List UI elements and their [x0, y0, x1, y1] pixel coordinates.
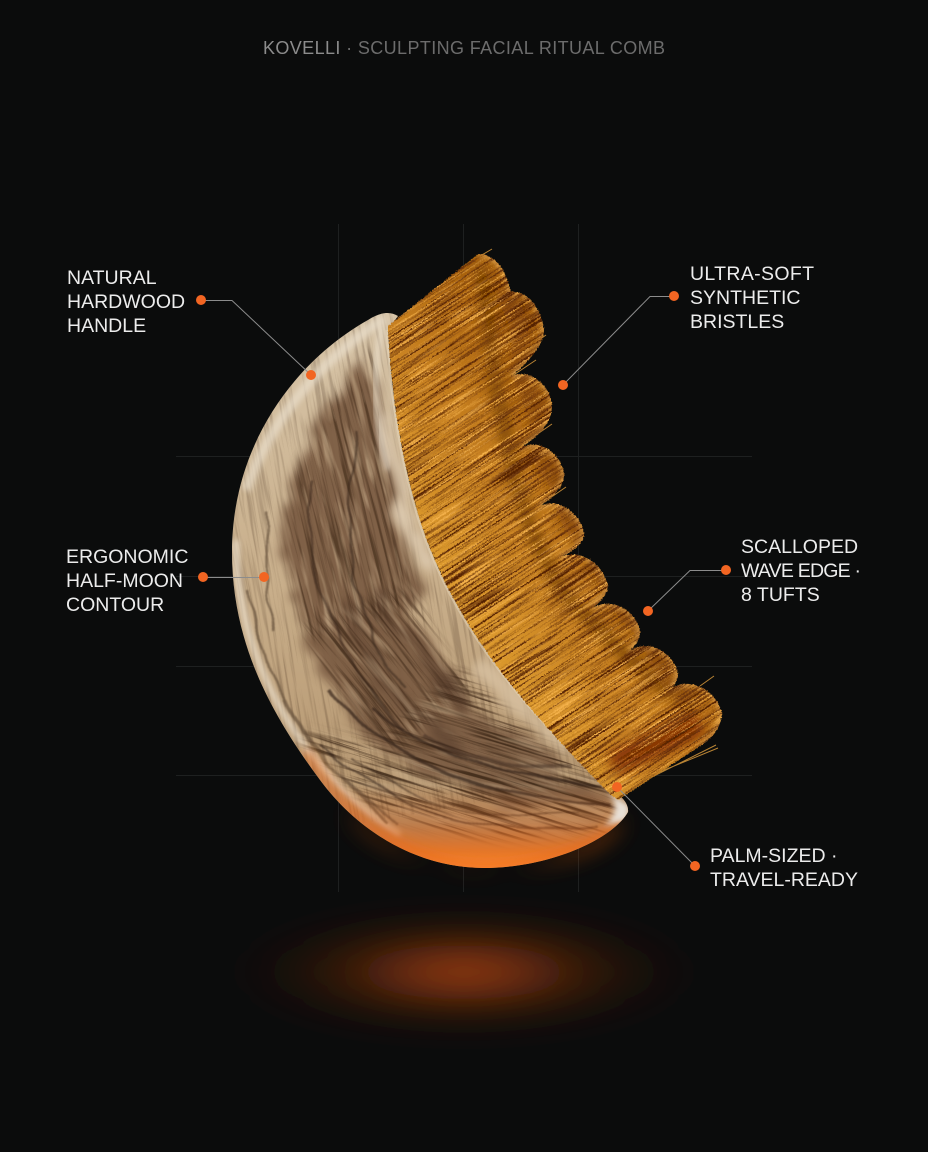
heartwood patches — [345, 590, 470, 750]
callout: scalloped wave edge: SCALLOPED — [741, 536, 858, 558]
floor glow — [219, 910, 709, 1034]
callout: natural hardwood handle — [67, 267, 316, 380]
infographic canvas — [67, 41, 859, 1032]
central ridge — [480, 265, 672, 695]
bristles — [388, 254, 722, 800]
callout: ultra-soft synthetic bristles: BRISTLES — [690, 311, 784, 333]
outer crescent grain — [232, 314, 595, 822]
callout: ergonomic half-moon contour: ERGONOMIC — [66, 546, 188, 568]
callout: ergonomic half-moon contour: CONTOUR — [66, 594, 164, 616]
callout: ergonomic half-moon contour — [66, 546, 269, 616]
tuft shading — [500, 290, 690, 700]
callout: ultra-soft synthetic bristles — [558, 263, 814, 390]
deep bristle shadow near tip — [612, 722, 700, 765]
callout: ultra-soft synthetic bristles: SYNTHETIC — [690, 287, 801, 309]
inner edge highlight — [386, 330, 579, 761]
dark grain lines — [310, 430, 612, 830]
callout: ergonomic half-moon contour: HALF-MOON — [66, 570, 183, 592]
construction grid — [176, 224, 752, 892]
callout: scalloped wave edge — [643, 536, 861, 616]
callout: ultra-soft synthetic bristles: ULTRA-SOFT — [690, 263, 814, 285]
callout: palm-sized travel-ready — [612, 782, 858, 891]
callout: palm-sized travel-ready: TRAVEL-READY — [710, 869, 858, 891]
wooden handle — [232, 313, 628, 868]
callout: natural hardwood handle: HARDWOOD — [67, 291, 185, 313]
callout: natural hardwood handle: NATURAL — [67, 267, 157, 289]
bristle fibre streaks — [388, 254, 722, 800]
orange rim along lower edge — [305, 752, 626, 868]
callout: scalloped wave edge: WAVE EDGE · — [741, 560, 861, 582]
tuft lit rim — [478, 254, 722, 746]
stray bristle hairs — [470, 249, 718, 788]
product glow under comb — [345, 810, 625, 870]
title: KOVELLI · SCULPTING FACIAL RITUAL COMB — [263, 38, 665, 58]
callout: palm-sized travel-ready: PALM-SIZED · — [710, 845, 837, 867]
comb — [232, 248, 722, 868]
callout: scalloped wave edge: 8 TUFTS — [741, 584, 820, 606]
warm underglow — [342, 791, 618, 868]
callout: natural hardwood handle: HANDLE — [67, 315, 146, 337]
dark heartwood band — [286, 352, 612, 808]
light marbled patches near inner edge — [384, 420, 432, 570]
handle rim highlight — [236, 540, 400, 835]
heartwood fibre streaks — [282, 343, 416, 642]
white tip — [604, 790, 630, 826]
inner ridge highlight — [376, 326, 388, 470]
handle outer rim grain — [248, 510, 400, 825]
